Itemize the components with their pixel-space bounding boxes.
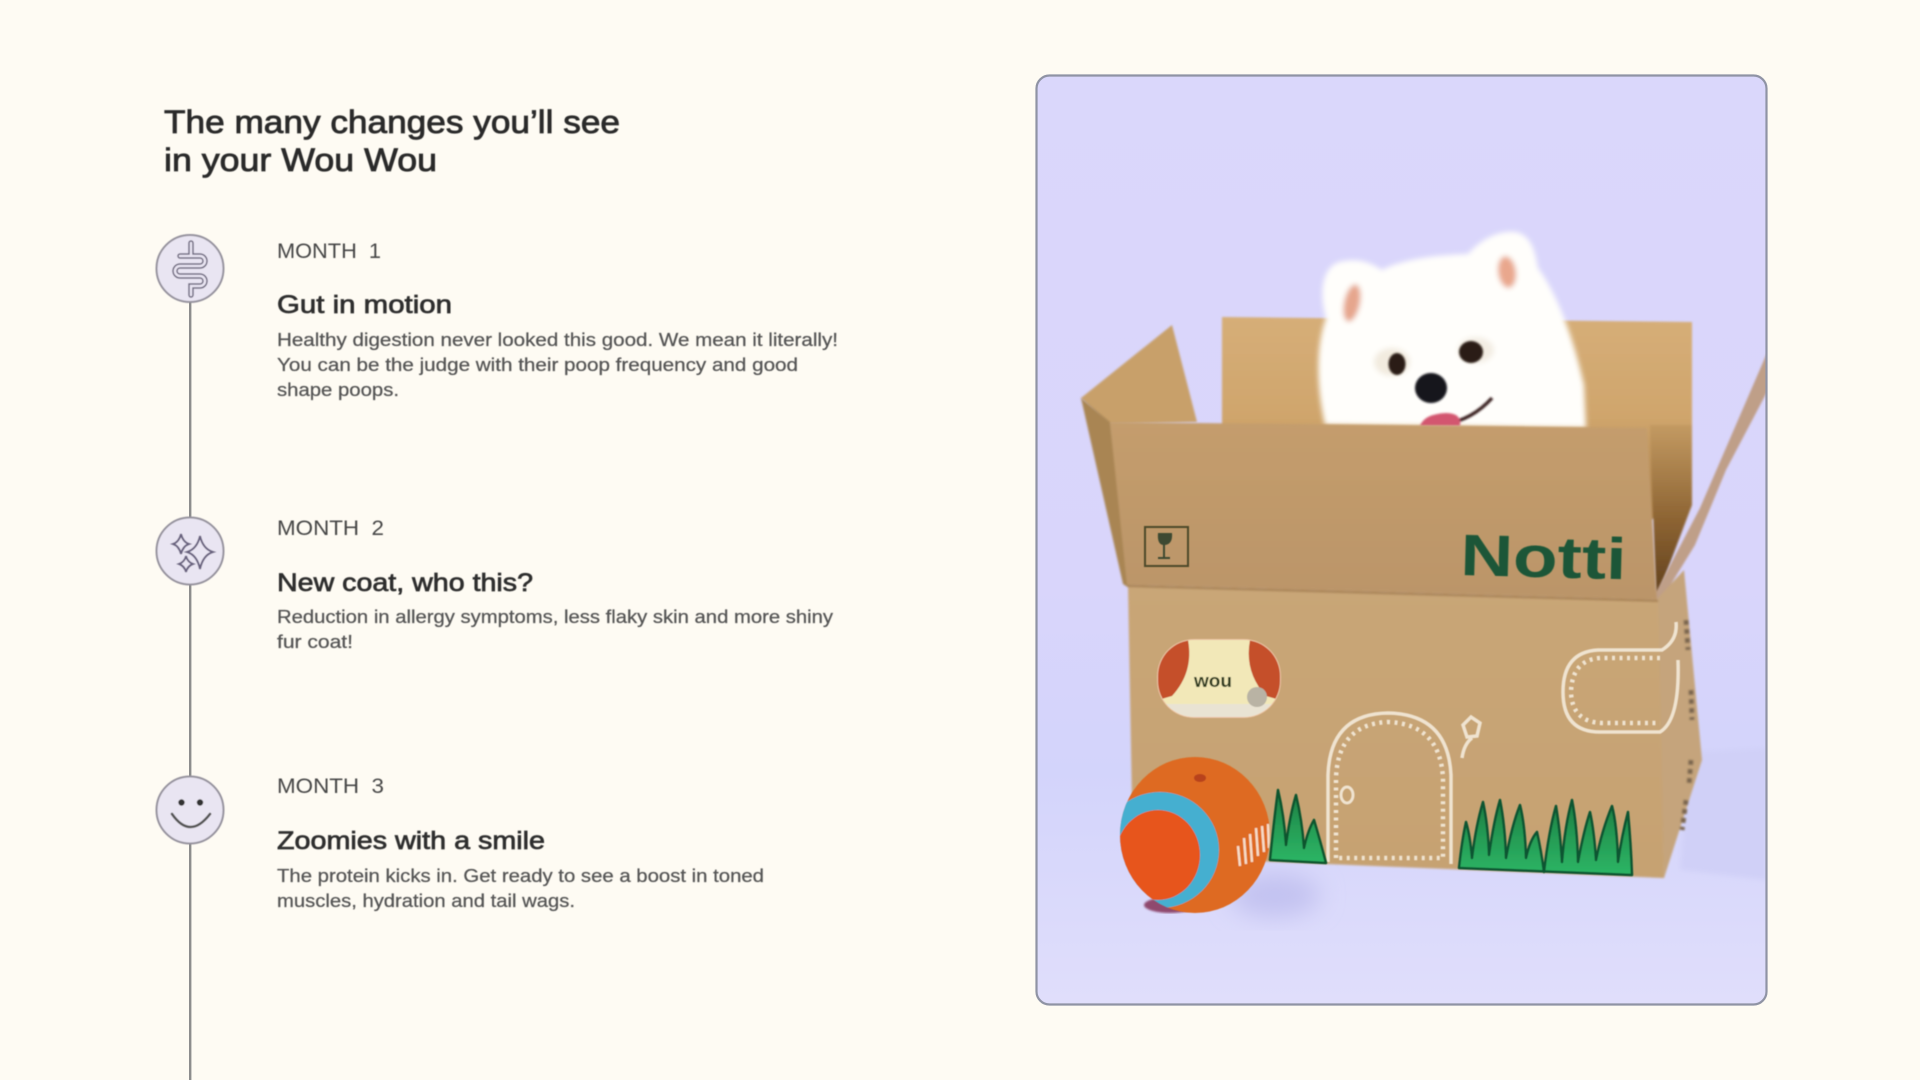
box interior [1081,317,1692,600]
photo background [1036,76,1766,1004]
flower drawing [1462,717,1480,758]
step: month 1: You can be the judge with their poop frequency and good [277,354,798,375]
ball ring [1119,791,1220,908]
timeline [156,235,224,1080]
timeline line [189,300,191,1080]
side marks [1682,620,1692,830]
right side panel [1656,570,1702,878]
step: month 1: shape poops. [277,379,399,400]
step: month 1: Gut in motion [277,291,452,319]
step: month 3: The protein kicks in. Get ready to see a boost in toned [277,865,764,886]
crease [1128,586,1658,601]
title [164,104,620,178]
ball [1101,757,1270,913]
step: month 3 [277,775,764,911]
sticker: wou [1193,671,1232,691]
back panel [1222,317,1692,520]
step: month 3: Zoomies with a smile [277,827,545,855]
step: month 1 [277,240,838,400]
sticker [1157,639,1281,718]
ball floor shadow [1230,873,1320,917]
dog head [1318,232,1586,428]
brand: Notti: Notti [1460,523,1627,592]
photo panel: dog in box [1036,76,1767,1004]
step: month 2: fur coat! [277,631,353,652]
inner shadow [1650,425,1692,600]
lower front panel [1128,586,1664,878]
step: month 2: Reduction in allergy symptoms, less flaky skin and more shiny [277,606,834,627]
step: month 2: MONTH 2 [277,517,384,540]
front flap [1110,422,1657,600]
door drawing [1328,713,1480,864]
dog face [1388,341,1492,426]
fragile mark [1145,527,1188,566]
step: month 2: New coat, who this? [277,569,533,597]
ball centre [1116,810,1200,900]
icon: intestine [156,235,224,302]
right flap [1654,353,1767,602]
grass left [1270,790,1326,863]
floor shade [1684,862,1763,876]
icon: smiley [156,776,224,844]
grass right [1459,800,1632,875]
left flap edge [1081,398,1129,588]
photo border [1036,76,1766,1004]
box front [1081,353,1767,878]
step: month 1: Healthy digestion never looked this good. We mean it literally! [277,329,838,350]
step: month 3: muscles, hydration and tail wags. [277,890,575,911]
step: month 1: MONTH 1 [277,240,381,263]
step: month 3: MONTH 3 [277,775,384,798]
ball stripes [1238,824,1269,866]
step: month 2 [277,517,834,652]
left flap [1081,325,1197,424]
icon: sparkles [156,518,224,584]
title: in your Wou Wou [164,142,437,178]
ball contact shadow [1142,898,1186,914]
handle drawing [1563,622,1678,732]
title: The many changes you’ll see [164,104,620,140]
